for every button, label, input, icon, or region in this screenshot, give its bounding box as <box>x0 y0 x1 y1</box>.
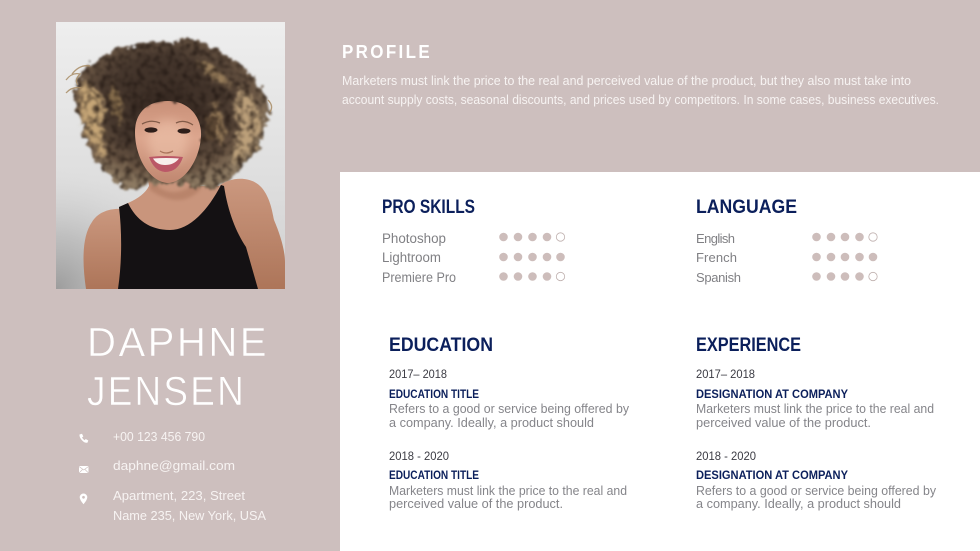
experience entry 2: Refers to a good or service being offered by <box>696 484 937 498</box>
education entry 1: a company. Ideally, a product should <box>389 416 594 430</box>
panel: experience <box>696 335 937 511</box>
profile text <box>342 74 939 107</box>
experience entry 1: 2017– 2018 <box>696 367 755 381</box>
hair <box>73 39 268 189</box>
fringe <box>142 101 220 142</box>
education entry 1: Refers to a good or service being offered by <box>389 402 630 416</box>
education entry 2 <box>389 449 627 511</box>
education entry 2: EDUCATION TITLE <box>389 468 479 482</box>
heading: EXPERIENCE <box>696 335 801 356</box>
experience entry 1: perceived value of the product. <box>696 416 871 430</box>
profile text: Marketers must link the price to the real and perceived value of the product, but they also must take into <box>342 74 911 88</box>
portrait photo <box>56 22 285 289</box>
name <box>87 319 269 414</box>
right arm <box>219 179 285 289</box>
address <box>113 488 266 523</box>
education entry 1 <box>389 367 630 430</box>
language rating dots <box>812 233 877 281</box>
neck and chest <box>119 180 220 230</box>
black top <box>118 185 258 289</box>
icon: location pin <box>80 494 87 504</box>
panel: education <box>389 335 630 511</box>
experience entry 2: DESIGNATION AT COMPANY <box>696 468 848 482</box>
skill rating dots <box>499 233 565 281</box>
eyes <box>144 127 158 133</box>
name: DAPHNE <box>87 319 269 365</box>
nose <box>160 151 173 153</box>
skill names: Premiere Pro <box>382 270 456 285</box>
experience entry 1: DESIGNATION AT COMPANY <box>696 387 848 401</box>
left arm <box>84 208 122 289</box>
experience entry 1: Marketers must link the price to the real and <box>696 402 934 416</box>
skill names: Lightroom <box>382 250 441 265</box>
experience entry 2: 2018 - 2020 <box>696 449 756 463</box>
experience entry 2: a company. Ideally, a product should <box>696 497 901 511</box>
address: Apartment, 223, Street <box>113 488 245 503</box>
language names: French <box>696 250 737 265</box>
icon: phone <box>79 434 88 443</box>
phone number: +00 123 456 790 <box>113 429 205 444</box>
language names: English <box>696 231 735 246</box>
education entry 2: 2018 - 2020 <box>389 449 449 463</box>
white content panel <box>340 172 980 551</box>
experience entry 2 <box>696 449 937 511</box>
hair wisps <box>66 66 272 112</box>
profile text: account supply costs, seasonal discounts, and prices used by competitors. In some cases, business executives. <box>342 93 939 107</box>
heading: profile: PROFILE <box>342 42 432 62</box>
skill names: Photoshop <box>382 231 446 246</box>
skill names <box>382 231 456 285</box>
face <box>135 101 201 183</box>
education entry 2: Marketers must link the price to the real and <box>389 484 627 498</box>
name: JENSEN <box>87 368 246 414</box>
address: Name 235, New York, USA <box>113 508 266 523</box>
mouth <box>149 156 183 172</box>
education entry 1: EDUCATION TITLE <box>389 387 479 401</box>
heading: PRO SKILLS <box>382 197 475 218</box>
panel: language <box>696 197 877 285</box>
heading: EDUCATION <box>389 335 493 356</box>
icon: envelope <box>79 466 88 473</box>
education entry 1: 2017– 2018 <box>389 367 447 381</box>
language names: Spanish <box>696 270 741 285</box>
email: daphne@gmail.com <box>113 458 235 473</box>
panel: pro skills <box>382 197 565 285</box>
language names <box>696 231 741 285</box>
education entry 2: perceived value of the product. <box>389 497 563 511</box>
heading: LANGUAGE <box>696 197 797 218</box>
experience entry 1 <box>696 367 934 430</box>
contact details <box>79 429 266 523</box>
